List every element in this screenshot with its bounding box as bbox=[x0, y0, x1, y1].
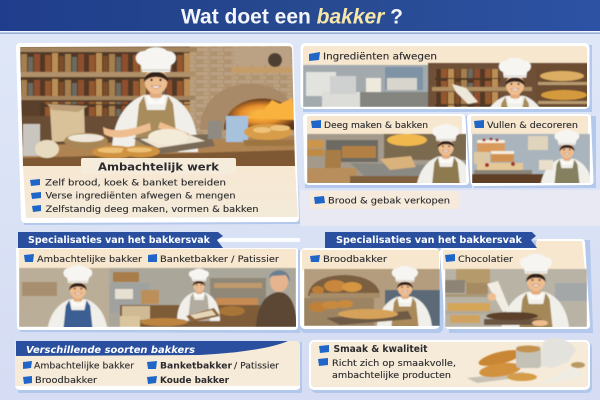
bullet list: Verse ingrediënten afwegen & mengen bbox=[46, 192, 236, 202]
bullet text bbox=[318, 358, 328, 366]
panel: deeg maken en bakken: Deeg maken & bakken bbox=[324, 121, 428, 131]
ribbon heading bbox=[16, 341, 288, 356]
bullet list: Zelf brood, koek & banket bereiden bbox=[45, 178, 226, 188]
panel: ingrediënten afwegen bbox=[300, 43, 592, 112]
illustration: bakers in shop bbox=[19, 265, 296, 327]
panel: broodbakker bbox=[300, 248, 443, 334]
list: Banketbakker bbox=[160, 362, 233, 372]
label: brood en gebak verkopen: Brood & gebak verkopen bbox=[328, 196, 450, 206]
title: Wat doet een bakker ? bbox=[181, 6, 403, 28]
illustration: baker at brick oven bbox=[20, 46, 300, 168]
illustration: weighing room bbox=[303, 58, 587, 107]
panel: vullen en decoreren bbox=[467, 114, 596, 194]
panel: verschillende soorten bakkers bbox=[15, 341, 302, 393]
list: Broodbakker bbox=[35, 376, 98, 386]
dough tray bbox=[133, 134, 215, 154]
cream caption area bbox=[23, 166, 298, 218]
bullet list bbox=[30, 178, 258, 215]
bullet label bbox=[310, 255, 320, 262]
list: Ambachtelijke bakker bbox=[34, 362, 135, 372]
panel: specialisaties links: Banketbakker / Patissier bbox=[160, 255, 279, 265]
bullet and label bbox=[309, 52, 320, 61]
header banner bbox=[0, 0, 600, 34]
caption tab bbox=[81, 158, 236, 174]
panel: specialisaties links: Ambachtelijke bakker bbox=[37, 255, 142, 265]
illustration: piping chocolate bbox=[445, 254, 587, 327]
panel: broodbakker: Broodbakker bbox=[323, 255, 387, 265]
bullet labels bbox=[24, 254, 34, 262]
illustration: cakes bbox=[472, 129, 590, 183]
list: / Patissier bbox=[234, 362, 280, 372]
illustration: bread and piping bag bbox=[467, 338, 585, 385]
list bbox=[23, 361, 280, 386]
panel: deeg maken en bakken bbox=[303, 114, 472, 188]
illustration: oven and dough bbox=[307, 124, 466, 183]
panel: chocolatier bbox=[440, 239, 593, 338]
panel: verschillende soorten bakkers: Verschillende soorten bakkers bbox=[26, 345, 195, 356]
panel: specialisaties links bbox=[16, 238, 300, 340]
panel: ingrediënten afwegen: Ingrediënten afwegen bbox=[323, 52, 437, 62]
bullet and label bbox=[311, 120, 321, 128]
panel: smaak en kwaliteit: Smaak & kwaliteit bbox=[334, 344, 428, 355]
ribbon: specialisaties rechts bbox=[325, 232, 537, 248]
panel: smaak en kwaliteit: Richt zich op smaakvolle, bbox=[332, 359, 456, 369]
bullet list: Zelfstandig deeg maken, vormen & bakken bbox=[46, 205, 258, 215]
panel: smaak en kwaliteit bbox=[309, 338, 592, 393]
flour sack bbox=[50, 106, 85, 142]
illustration: bread oven bbox=[304, 266, 440, 326]
ribbon: specialisaties links bbox=[18, 232, 223, 248]
ribbon: specialisaties links: Specialisaties van het bakkersvak bbox=[28, 235, 210, 246]
panel: chocolatier: Chocolatier bbox=[458, 255, 513, 265]
bullet and label bbox=[474, 120, 484, 128]
caption heading: Ambachtelijk werk bbox=[98, 160, 220, 174]
panel: ambachtelijk werk bbox=[16, 43, 300, 225]
panel: vullen en decoreren: Vullen & decoreren bbox=[487, 121, 578, 131]
label: brood en gebak verkopen bbox=[309, 191, 460, 209]
list: Koude bakker bbox=[160, 376, 230, 386]
bullet label bbox=[445, 254, 455, 262]
panel: smaak en kwaliteit: ambachtelijke producten bbox=[332, 371, 451, 381]
ribbon: specialisaties rechts: Specialisaties van het bakkersvak bbox=[336, 235, 522, 246]
bullet heading bbox=[319, 345, 329, 353]
